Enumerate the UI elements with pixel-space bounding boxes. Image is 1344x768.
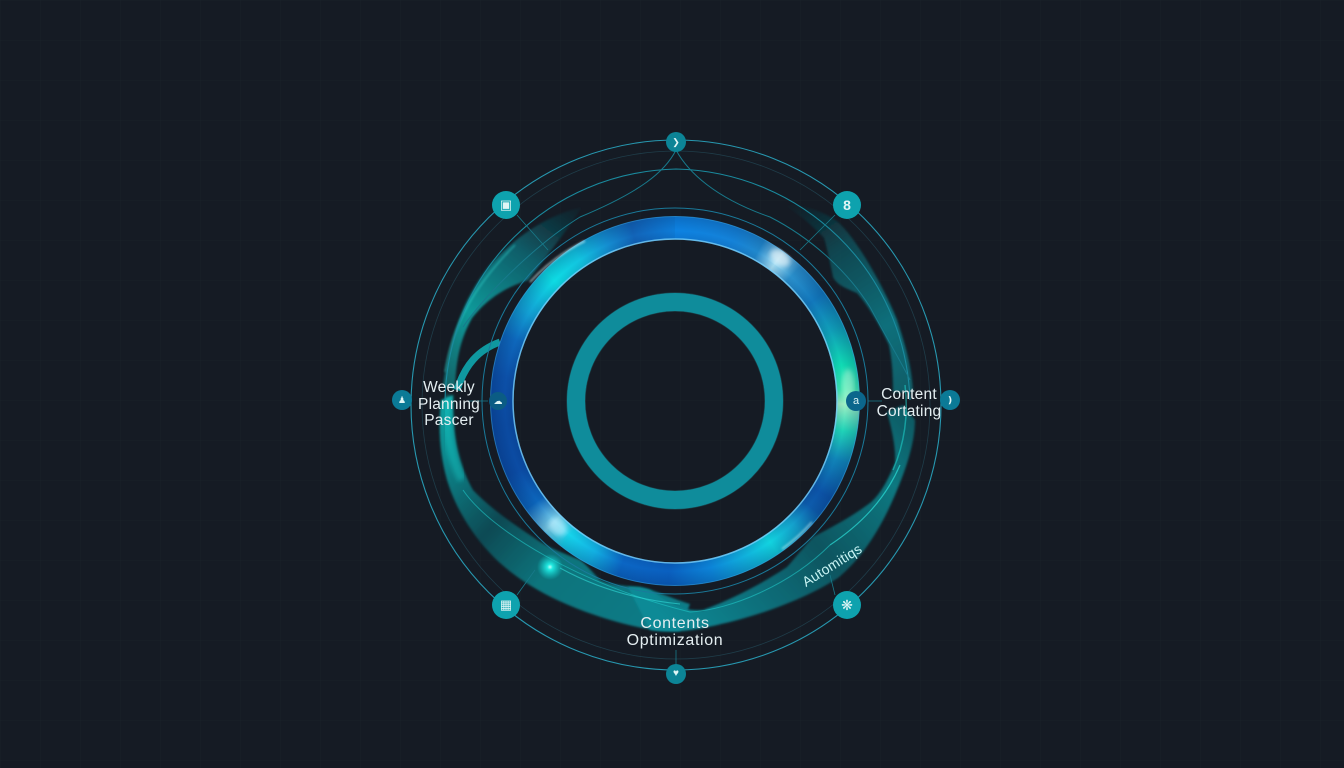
node: far left [392, 390, 412, 410]
label: automation on ribbon: Automitiqs [799, 540, 865, 590]
node: top [666, 132, 686, 152]
label: content cortating: Content [881, 386, 937, 403]
node: upper left: ▣ [500, 197, 512, 212]
label: contents optimization: Contents [640, 615, 710, 632]
node: lower right: ❋ [841, 597, 853, 613]
inner ring [567, 293, 783, 509]
label: weekly planning pacer: Planning [418, 396, 480, 412]
outer orbit circle [411, 140, 941, 670]
node: inner right [846, 391, 866, 411]
node: inner left [489, 392, 507, 410]
node: far right [940, 390, 960, 410]
node: lower left: ▦ [500, 597, 512, 612]
node: lower left [492, 591, 520, 619]
faint orbit circle [422, 151, 930, 659]
label: content cortating [877, 386, 941, 420]
node: inner right: a [853, 395, 859, 407]
node: inner left: ☁ [494, 396, 502, 406]
node: bottom [666, 664, 686, 684]
node: top: ❯ [672, 137, 680, 147]
label: contents optimization [627, 615, 723, 648]
node spokes [469, 215, 882, 665]
orbit line near ring [482, 208, 868, 594]
node: upper right [833, 191, 861, 219]
curved connector lines from top node [463, 150, 676, 327]
label: weekly planning pacer: Pascer [424, 412, 474, 429]
label: weekly planning pacer: Weekly [423, 379, 475, 396]
node: lower right [833, 591, 861, 619]
label: contents optimization: Optimization [627, 632, 723, 648]
label: weekly planning pacer [418, 379, 480, 429]
node: bottom: ♥ [673, 668, 679, 679]
node: upper left [492, 191, 520, 219]
node: far right: ❫ [946, 395, 954, 405]
node: far left: ♟ [398, 395, 406, 405]
lower orbit strands [463, 490, 830, 612]
outer ring: blue cyan gradient band [490, 216, 860, 586]
node: upper right: 8 [843, 197, 851, 213]
middle orbit line [445, 169, 910, 400]
label: content cortating: Cortating [877, 402, 941, 420]
